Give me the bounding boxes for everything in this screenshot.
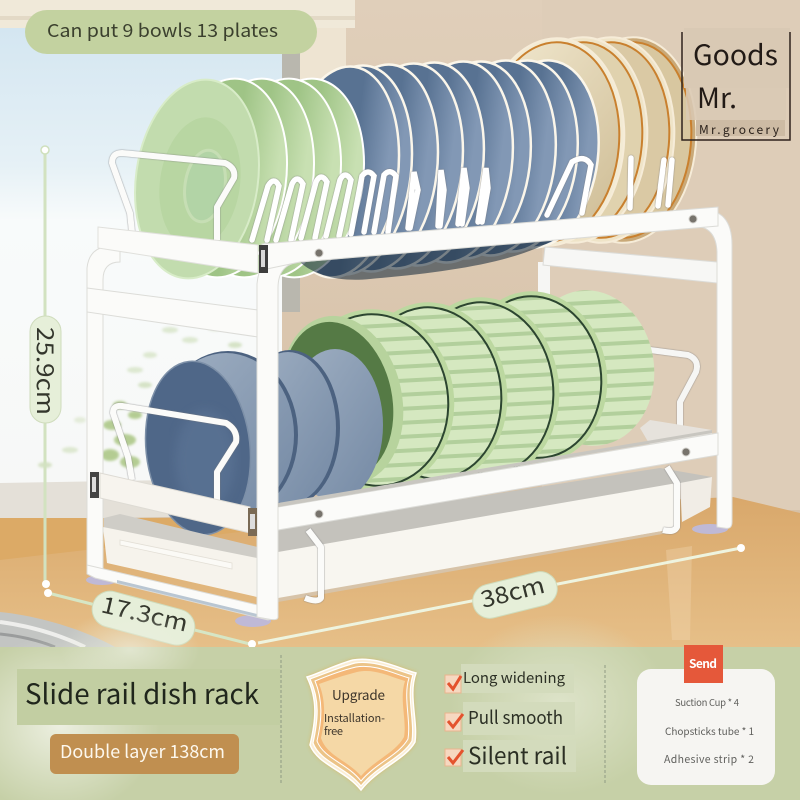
cream plates — [471, 31, 705, 252]
left rear post — [87, 247, 120, 572]
lower front shelf and handle — [90, 406, 257, 536]
drawer hooks — [305, 467, 677, 600]
feature: long widening: Long widening — [463, 667, 566, 688]
depth dimension line — [44, 586, 250, 649]
brand badge: Mr.grocery — [699, 121, 780, 138]
top capacity pill: Can put 9 bowls 13 plates — [47, 17, 278, 43]
blue plates — [272, 54, 609, 284]
height dimension line — [30, 146, 64, 588]
product title: Slide rail dish rack — [25, 673, 260, 713]
drawer tray — [103, 468, 712, 602]
upper front shelf and handle — [98, 153, 268, 273]
bottom panel — [0, 610, 800, 800]
product title — [17, 669, 280, 725]
rear lower handle — [650, 350, 697, 432]
green plates — [123, 71, 376, 287]
upgrade shield: free — [324, 723, 343, 739]
plate undersides below shelf — [300, 236, 560, 280]
height dimension line: 25.9cm — [30, 327, 64, 415]
feature: long widening — [445, 664, 574, 693]
feature: silent rail: Silent rail — [468, 737, 567, 771]
width dimension line: 38cm — [476, 566, 548, 615]
rear frame and cross bar — [538, 247, 717, 312]
gift card: Chopsticks tube * 1 — [665, 723, 754, 738]
blue bowls — [137, 349, 383, 540]
gift card: Suction Cup * 4 — [675, 695, 739, 709]
upgrade shield: Upgrade — [332, 684, 385, 704]
size badge — [50, 734, 239, 774]
suction cups — [86, 524, 728, 627]
brand badge: Mr. — [697, 77, 737, 117]
gift card: Adhesive strip * 2 — [664, 752, 754, 767]
depth dimension line: 17.3cm — [98, 586, 192, 639]
feature: pull smooth: Pull smooth — [468, 704, 563, 730]
brand badge — [682, 28, 790, 140]
size badge: Double layer 138cm — [60, 738, 225, 764]
feature: pull smooth — [445, 702, 575, 735]
upgrade shield — [307, 659, 416, 790]
brand badge: Goods — [693, 34, 778, 74]
rear lower shelf tray — [640, 420, 712, 445]
rack tines — [252, 158, 672, 240]
rack frame — [87, 207, 732, 620]
gift card: Send — [689, 655, 717, 672]
green bowls — [266, 282, 664, 501]
rack screws — [315, 215, 697, 518]
gift card — [637, 645, 775, 785]
width dimension line — [248, 544, 745, 648]
upgrade shield: Installation- — [324, 710, 385, 726]
top capacity pill — [25, 10, 317, 54]
